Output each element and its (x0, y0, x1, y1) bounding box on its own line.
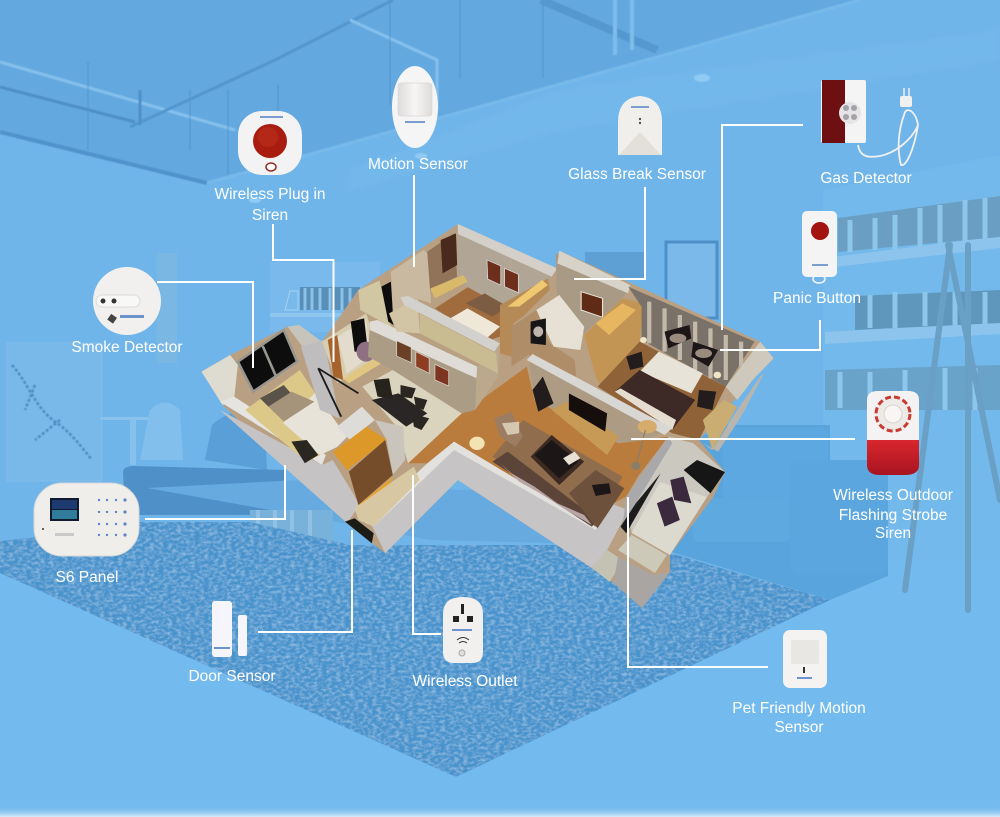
line: door sensor (258, 530, 352, 632)
label: wireless plug in siren: Siren (252, 207, 288, 224)
bathroom and closet (511, 251, 643, 387)
upper corridor walls (358, 250, 500, 373)
kitchen (238, 325, 347, 463)
line: glass break sensor (574, 187, 645, 279)
dining pictures (397, 341, 411, 363)
line: wireless outlet (413, 475, 441, 634)
entry cabinet (333, 407, 420, 543)
ceiling (0, 0, 860, 183)
upper bedroom (427, 224, 557, 357)
outer wall: lower (367, 438, 628, 568)
device: smoke detector (93, 267, 161, 335)
upper wall band (350, 30, 1000, 190)
abstract painting (7, 343, 102, 481)
right sofa (665, 425, 888, 600)
left chairs and table (100, 402, 285, 515)
device: wireless plug in siren (238, 111, 302, 175)
device: outdoor strobe siren (867, 391, 919, 475)
label: panic button: Panic Button (773, 290, 861, 307)
dining table (372, 393, 427, 427)
line: S6 panel (145, 465, 285, 519)
label: wireless plug in siren: Wireless Plug in (214, 186, 326, 203)
device: wireless outlet (443, 597, 483, 663)
left door (157, 253, 177, 363)
label: pet friendly motion sensor: Sensor (774, 719, 824, 736)
line: panic button (720, 320, 820, 350)
connector lines (145, 125, 855, 667)
device: gas detector (821, 80, 918, 165)
terrace (592, 437, 725, 608)
label: outdoor strobe siren: Siren (875, 525, 911, 542)
line: smoke detector (157, 282, 253, 368)
device: glass break sensor (618, 96, 662, 155)
terrace steps (618, 535, 667, 573)
label: motion sensor: Motion Sensor (368, 156, 468, 173)
device: panic button (802, 211, 837, 283)
coat rack (905, 245, 1000, 610)
master bedroom (598, 287, 774, 452)
left bookshelf (270, 262, 380, 332)
line: outdoor siren (631, 438, 855, 440)
device: S6 panel (34, 483, 139, 556)
dining area (362, 320, 500, 463)
rug (0, 522, 830, 777)
label: wireless outlet: Wireless Outlet (412, 673, 518, 690)
device: door sensor (212, 601, 247, 657)
label: smoke detector: Smoke Detector (71, 339, 183, 356)
apartment floor plan (201, 224, 774, 608)
floor (0, 560, 1000, 817)
line: plug in siren (273, 224, 334, 362)
living room (469, 412, 645, 528)
line: gas detector (722, 125, 803, 330)
label: glass break sensor: Glass Break Sensor (568, 166, 706, 183)
device: motion sensor (392, 66, 438, 148)
device: pet friendly motion sensor (783, 630, 827, 688)
label: gas detector: Gas Detector (820, 170, 912, 187)
label: S6 panel: S6 Panel (56, 569, 118, 586)
label: door sensor: Door Sensor (188, 668, 276, 685)
picture frame (666, 242, 717, 318)
ceiling spot lights (249, 74, 710, 203)
plan base silhouette (201, 224, 774, 608)
label: outdoor strobe siren: Wireless Outdoor (833, 487, 953, 504)
label: outdoor strobe siren: Flashing Strobe (839, 507, 947, 524)
line: motion sensor (413, 175, 415, 267)
label: pet friendly motion sensor: Pet Friendly Motion (732, 700, 866, 717)
outer wall: left (201, 355, 360, 523)
book rows (825, 196, 1000, 410)
TV wall (527, 354, 672, 455)
bay window room (318, 313, 381, 417)
coffee table (147, 480, 640, 565)
window frame behind plan (585, 252, 645, 280)
right bookcase panel (823, 155, 1000, 560)
column between kitchen and dining (301, 340, 339, 418)
kitchen windows (238, 330, 297, 392)
shelf boards (825, 236, 1000, 268)
living floor (408, 367, 668, 527)
line: pet friendly sensor (628, 497, 768, 667)
